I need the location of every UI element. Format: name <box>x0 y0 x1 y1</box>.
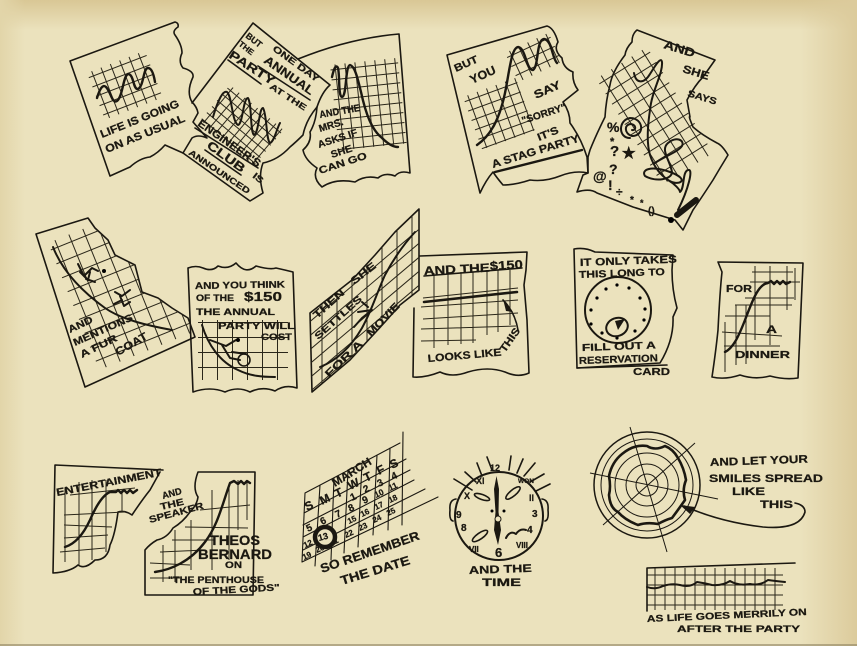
target chart: smiles spread <box>590 427 823 552</box>
grid <box>647 563 795 611</box>
text: AND <box>662 37 697 60</box>
panel: entertainment <box>53 465 163 573</box>
grid <box>198 320 288 380</box>
swear symbols: ? <box>609 161 618 177</box>
weekday and date numerals: 20 <box>314 543 326 555</box>
text: BERNARD <box>198 546 272 562</box>
announcement text: ONE DAY <box>271 44 321 84</box>
chart: life goes merrily on <box>647 563 807 635</box>
text: IT'S <box>536 124 561 144</box>
ears <box>450 499 548 521</box>
grids <box>463 33 562 150</box>
caption: LIFE IS GOING <box>99 98 181 141</box>
text: THE ANNUAL <box>196 307 275 318</box>
weekday and date numerals: 7 <box>334 508 344 521</box>
torn paper outline <box>413 252 529 377</box>
torn paper outline <box>577 30 728 230</box>
weekday and date numerals: W <box>345 475 362 493</box>
caption: AS LIFE GOES MERRILY ON <box>647 607 807 625</box>
panel: you think of the $150 <box>188 263 297 392</box>
weekday and date numerals: 19 <box>301 550 313 562</box>
text: $150 <box>489 257 524 273</box>
thick wavy ring <box>609 446 686 525</box>
rising line <box>477 39 557 145</box>
scribble line <box>634 60 690 210</box>
swear symbols: * <box>630 195 634 206</box>
text <box>311 260 402 380</box>
text <box>148 486 280 598</box>
announcement text: BUT <box>244 31 264 50</box>
numerals: II <box>529 493 534 503</box>
grid <box>60 480 135 566</box>
numerals: 6 <box>495 545 502 560</box>
torn paper outline <box>298 34 410 187</box>
text: SPEAKER <box>148 501 205 526</box>
weekday and date numerals: 8 <box>347 502 357 515</box>
numerals: 9 <box>456 510 462 521</box>
text: THEOS <box>210 532 260 548</box>
swear symbols: ? <box>610 143 619 160</box>
numerals: X <box>464 491 470 501</box>
text: AND <box>67 315 95 336</box>
text: CARD <box>633 367 670 378</box>
fur coat figures <box>78 264 130 306</box>
text: SAYS <box>686 88 718 108</box>
grid <box>421 270 518 348</box>
text: "THE PENTHOUSE <box>168 575 264 586</box>
text: IT ONLY TAKES <box>580 254 677 269</box>
announcement text: ANNUAL <box>261 53 317 98</box>
rising line <box>155 481 250 572</box>
swear symbols: * <box>610 136 615 148</box>
weekday and date numerals: F <box>374 462 387 478</box>
text <box>423 257 524 365</box>
weekday and date numerals: 18 <box>387 493 399 505</box>
text <box>452 53 582 172</box>
numerals: 3 <box>532 509 538 520</box>
numerals: VIII <box>516 541 528 550</box>
eyes and mouth <box>471 485 526 544</box>
text: LIKE <box>732 486 765 498</box>
caption <box>317 103 369 177</box>
bicycle figure <box>210 338 250 366</box>
text: SHE <box>348 260 379 287</box>
exclamation mark <box>668 200 696 223</box>
text: A FUR <box>78 333 120 361</box>
numerals: 12 <box>490 463 500 473</box>
numerals <box>456 463 538 560</box>
panel: for a dinner <box>712 262 803 379</box>
torn paper outline <box>310 209 419 392</box>
grid <box>310 216 419 390</box>
panel: the speaker theos bernard <box>145 472 280 598</box>
weekday and date numerals: 2 <box>362 483 372 496</box>
text: RESERVATION <box>579 353 658 367</box>
grid <box>87 51 163 120</box>
weekday and date numerals: 16 <box>359 507 371 519</box>
caption <box>318 529 421 588</box>
weekday and date numerals: T <box>332 485 346 501</box>
text: SMILES SPREAD <box>709 473 823 485</box>
caption: CAN GO <box>318 151 369 177</box>
text: FOR <box>726 283 752 295</box>
rising line <box>320 232 415 367</box>
text: AND LET YOUR <box>710 454 808 469</box>
caption: SHE <box>330 143 354 161</box>
numerals: XI <box>476 476 485 486</box>
weekday and date numerals: T <box>361 469 375 485</box>
clock hands <box>494 476 501 545</box>
text: PARTY WILL <box>218 321 295 332</box>
text: YOU <box>468 63 498 87</box>
text: BUT <box>452 53 481 75</box>
weekday and date numerals: 10 <box>373 487 386 500</box>
swear symbols <box>593 118 655 217</box>
text: LOOKS LIKE <box>427 347 502 365</box>
numerals: 4 <box>527 525 533 536</box>
caption: SO REMEMBER <box>318 529 421 576</box>
weekday and date numerals <box>301 456 401 562</box>
caption: MRS. <box>318 117 345 135</box>
text <box>726 283 791 361</box>
weekday and date numerals: 4 <box>390 470 400 483</box>
announcement text: CLUB <box>204 138 248 176</box>
circled date 13 <box>315 527 335 547</box>
weekday and date numerals: S <box>302 498 316 514</box>
flat line <box>424 292 517 302</box>
panel: and the mrs asks <box>298 34 410 187</box>
text: AND YOU THINK <box>195 279 285 292</box>
text: THEN <box>311 287 347 321</box>
title: ENTERTAINMENT <box>55 467 163 499</box>
weekday and date numerals: 6 <box>319 515 329 528</box>
text: THIS <box>760 499 793 511</box>
weekday and date numerals: 24 <box>371 513 383 525</box>
text <box>577 254 677 378</box>
announcement text <box>187 31 321 196</box>
grid <box>150 480 250 582</box>
rising line <box>725 281 790 352</box>
text: COAT <box>114 331 150 359</box>
weekday and date numerals: 17 <box>373 500 385 512</box>
text: FILL OUT A <box>582 340 656 354</box>
wavy line <box>97 68 155 101</box>
text: THIS LONG TO <box>579 267 665 281</box>
announcement text: PARTY <box>226 48 278 88</box>
grid <box>722 266 800 372</box>
text: COST <box>261 332 292 343</box>
announcement text: THE <box>237 39 256 57</box>
grid <box>596 47 713 185</box>
caption: AND THE <box>469 563 532 577</box>
falling line <box>332 65 398 147</box>
caption: TIME <box>482 577 521 589</box>
grid <box>330 58 407 151</box>
torn paper outline <box>447 26 588 193</box>
weekday and date numerals: 1 <box>349 491 359 504</box>
caption <box>469 563 532 589</box>
falling line <box>53 247 172 330</box>
text: AND THE <box>423 261 490 278</box>
caption <box>647 607 807 635</box>
torn paper outline <box>145 472 255 595</box>
caption: ASKS IF <box>317 128 359 151</box>
text: MOVIE <box>365 301 402 339</box>
text: DINNER <box>735 349 791 361</box>
text: A <box>766 324 777 336</box>
weekday and date numerals: M <box>317 491 332 508</box>
rising line <box>65 490 137 547</box>
announcement text: AT THE <box>268 81 309 113</box>
weekday and date numerals: 22 <box>343 528 355 540</box>
text: AND <box>161 486 183 502</box>
grid <box>200 85 284 165</box>
calendar grid <box>302 432 438 566</box>
weekday and date numerals: 3 <box>376 477 386 490</box>
text: SAY <box>532 79 563 102</box>
panel: life is going on as usual: ON AS USUAL <box>104 113 187 156</box>
announcement text: ENGINEER'S <box>195 118 263 170</box>
calendar: march <box>301 432 438 588</box>
text: A STAG PARTY <box>490 133 582 171</box>
text: ON <box>225 560 242 570</box>
text <box>709 454 823 511</box>
swear symbols: % <box>607 119 620 135</box>
panel: and she says <box>577 30 728 230</box>
text: $150 <box>244 289 282 304</box>
text: THE <box>159 497 185 513</box>
numerals: VII <box>469 545 479 554</box>
clock face <box>450 456 550 589</box>
torn paper outline <box>574 248 677 368</box>
grid <box>50 228 190 368</box>
swear symbols: @ <box>593 168 607 184</box>
text: SHE <box>681 63 710 83</box>
arrow <box>680 503 805 527</box>
swear symbols: * <box>640 198 644 208</box>
circled date 13: 13 <box>317 531 329 543</box>
text <box>662 37 718 108</box>
weekday and date numerals: 9 <box>361 494 371 507</box>
torn paper outline <box>70 22 207 176</box>
swear symbols: () <box>648 206 655 217</box>
torn paper outline <box>36 218 195 387</box>
swear symbols: ÷ <box>616 185 623 199</box>
caption: THE DATE <box>339 553 412 588</box>
figure <box>354 302 372 327</box>
text <box>67 312 150 361</box>
text <box>195 279 295 343</box>
panel: stag party <box>447 26 588 193</box>
weekday and date numerals: 12 <box>302 538 314 550</box>
panel: reservation card clock <box>574 248 677 378</box>
text: FOR A <box>323 338 366 380</box>
weekday and date numerals: 21 <box>328 536 340 548</box>
hair spikes <box>454 456 550 491</box>
wavy line <box>647 580 785 588</box>
weekday and date numerals: S <box>387 456 401 472</box>
month: MARCH <box>330 456 374 490</box>
arrow <box>503 299 518 330</box>
text: "SORRY" <box>521 102 568 127</box>
weekday and date numerals: 11 <box>387 480 399 493</box>
swear symbols: ! <box>608 177 613 193</box>
weekday and date numerals: 25 <box>385 506 397 518</box>
text: OF THE <box>196 293 234 303</box>
panel: the $150 looks like this <box>413 252 529 377</box>
panel: settles for a movie <box>309 208 420 393</box>
text: OF THE GODS" <box>193 582 280 598</box>
announcement text: IS <box>251 171 266 185</box>
concentric circles <box>590 427 718 552</box>
text: THIS <box>498 326 523 355</box>
panel: engineers club party announced <box>183 23 330 201</box>
falling line <box>202 325 275 377</box>
torn paper outline <box>188 263 297 392</box>
weekday and date numerals: 15 <box>346 514 358 526</box>
numerals: 8 <box>461 523 467 534</box>
weekday and date numerals: 5 <box>305 522 315 535</box>
text: MENTIONS <box>72 312 135 349</box>
torn paper outline <box>183 23 330 201</box>
weekday and date numerals: 23 <box>357 521 369 533</box>
torn paper outline <box>53 465 163 573</box>
caption: AFTER THE PARTY <box>677 624 801 635</box>
head circle <box>455 472 543 560</box>
caption: AND THE <box>319 103 361 121</box>
numerals: WON <box>518 478 534 485</box>
announcement text: ANNOUNCED <box>187 147 252 196</box>
panel: life is going on as usual <box>70 22 207 176</box>
clock dial <box>585 277 651 343</box>
zigzag line <box>213 92 280 143</box>
swear symbols: ★ <box>622 145 636 162</box>
text: SETTLES <box>313 294 365 342</box>
torn paper outline <box>712 262 803 379</box>
panel: mentions a fur coat <box>36 204 197 387</box>
